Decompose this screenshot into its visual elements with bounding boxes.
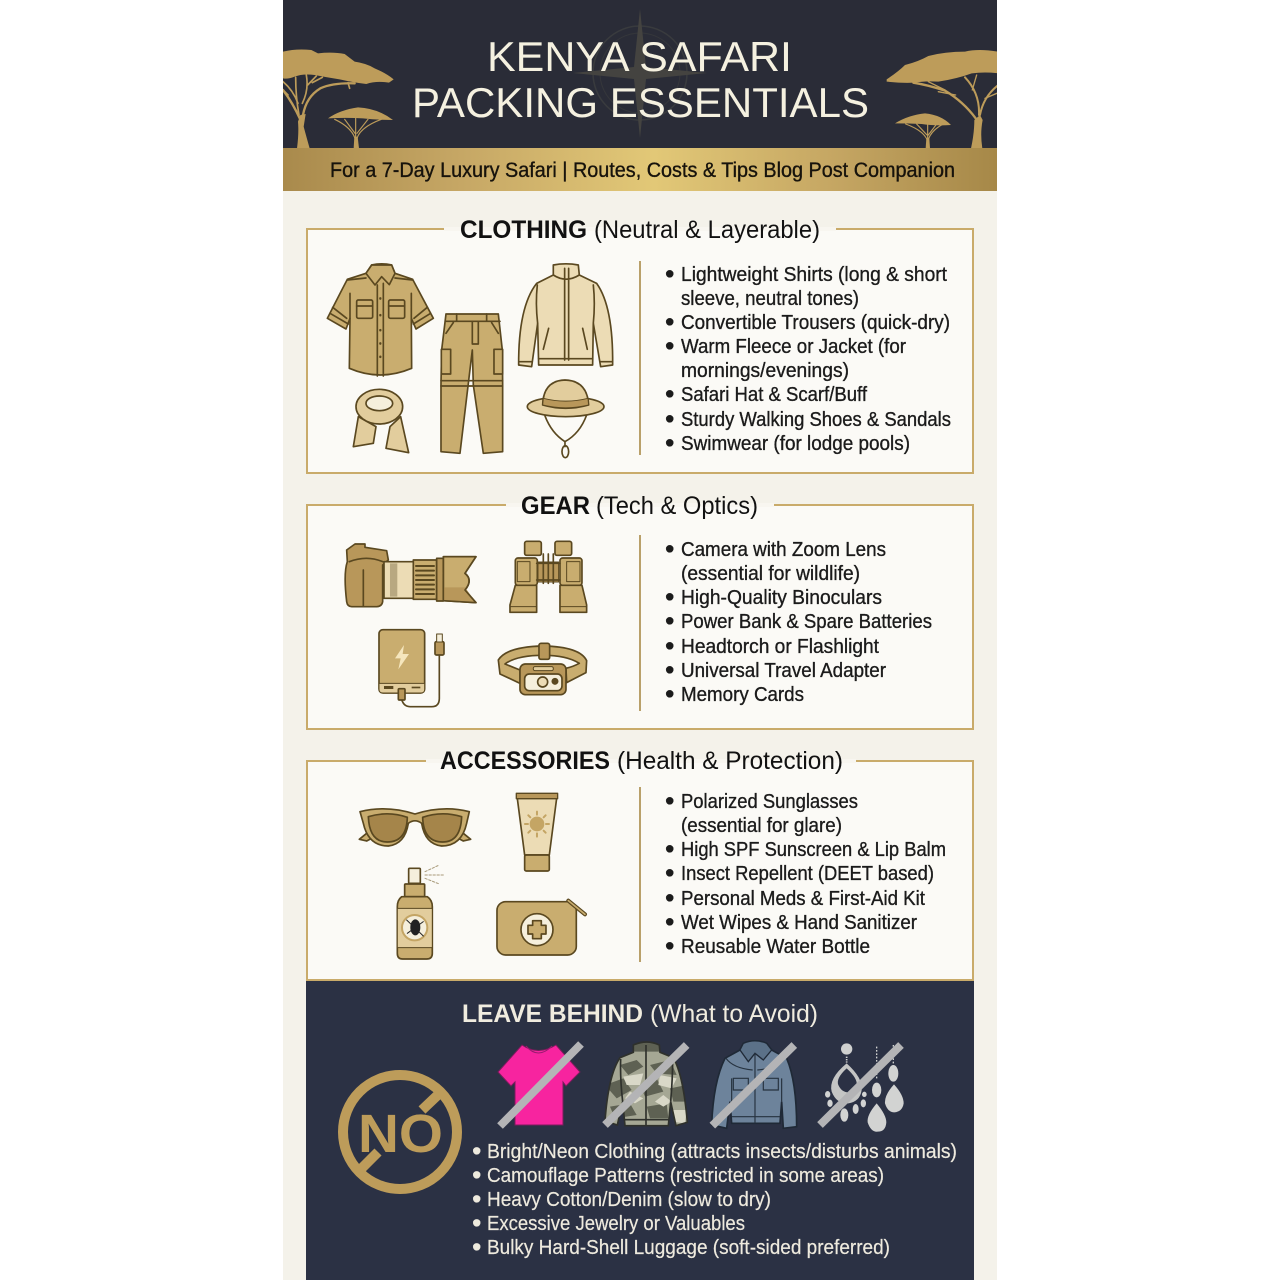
gear list bbox=[665, 534, 932, 709]
gear list: Headtorch or Flashlight bbox=[681, 635, 879, 658]
accessories list: Insect Repellent (DEET based) bbox=[681, 862, 934, 885]
gear list: • bbox=[665, 631, 674, 661]
icon: sunglasses bbox=[359, 809, 471, 846]
accessories list: • bbox=[665, 883, 674, 913]
gear list: • bbox=[665, 655, 674, 685]
accessories list: Polarized Sunglasses bbox=[681, 790, 858, 813]
icon: jewelry bbox=[820, 1043, 904, 1132]
gear list: • bbox=[665, 582, 674, 612]
icon: sunscreen tube bbox=[516, 793, 558, 871]
clothing list: Sturdy Walking Shoes & Sandals bbox=[681, 408, 951, 431]
icon: no symbol bbox=[343, 1075, 457, 1189]
gear list: Memory Cards bbox=[681, 683, 804, 706]
icon: headtorch bbox=[498, 643, 587, 695]
clothing list: Lightweight Shirts (long & short bbox=[681, 263, 947, 286]
icon: first-aid kit bbox=[497, 901, 585, 955]
icon: camouflage jacket bbox=[605, 1040, 687, 1126]
clothing list: • bbox=[665, 331, 674, 361]
icon: safari hat bbox=[527, 380, 604, 458]
accessories list: • bbox=[665, 907, 674, 937]
subtitle band bbox=[283, 148, 997, 191]
heading: gear: GEAR bbox=[521, 492, 590, 520]
icon: binoculars bbox=[510, 541, 587, 612]
leave-behind list: Bright/Neon Clothing (attracts insects/disturbs animals) bbox=[487, 1140, 957, 1163]
acacia tree: right small bbox=[895, 113, 951, 148]
accessories list: High SPF Sunscreen & Lip Balm bbox=[681, 838, 946, 861]
leave-behind list: Bulky Hard-Shell Luggage (soft-sided preferred) bbox=[487, 1236, 890, 1259]
icon: camera bbox=[345, 544, 476, 607]
page background bbox=[283, 0, 997, 1280]
accessories list: • bbox=[665, 931, 674, 961]
leave-behind list: Camouflage Patterns (restricted in some areas) bbox=[487, 1164, 884, 1187]
compass watermark bbox=[573, 9, 707, 138]
heading: gear: (Tech & Optics) bbox=[596, 492, 758, 520]
acacia tree: left large bbox=[283, 49, 394, 148]
icon: trousers bbox=[441, 314, 503, 453]
accessories list: Reusable Water Bottle bbox=[681, 935, 870, 958]
heading: accessories: (Health & Protection) bbox=[617, 747, 843, 775]
gear list: • bbox=[665, 606, 674, 636]
icon: denim jacket bbox=[712, 1041, 797, 1128]
leave-behind list: Heavy Cotton/Denim (slow to dry) bbox=[487, 1188, 771, 1211]
heading: leave behind: (What to Avoid) bbox=[650, 1000, 818, 1028]
gear list: Power Bank & Spare Batteries bbox=[681, 610, 932, 633]
acacia tree: left small bbox=[328, 107, 393, 148]
accessories list: (essential for glare) bbox=[681, 814, 842, 837]
clothing list: Swimwear (for lodge pools) bbox=[681, 432, 910, 455]
main title: PACKING ESSENTIALS bbox=[412, 79, 869, 126]
clothing list: • bbox=[665, 404, 674, 434]
heading: clothing: (Neutral & Layerable) bbox=[594, 216, 820, 244]
leave-behind list bbox=[472, 1136, 957, 1262]
accessories list: • bbox=[665, 786, 674, 816]
accessories list: Personal Meds & First-Aid Kit bbox=[681, 887, 925, 910]
gear list: • bbox=[665, 679, 674, 709]
leave-behind list: • bbox=[472, 1232, 481, 1262]
clothing list: • bbox=[665, 259, 674, 289]
icon: scarf bbox=[353, 389, 409, 453]
icon: fleece jacket bbox=[519, 264, 613, 367]
clothing list bbox=[665, 259, 951, 458]
header banner bbox=[283, 0, 998, 148]
clothing list: Warm Fleece or Jacket (for bbox=[681, 335, 906, 358]
acacia tree: right large bbox=[887, 50, 998, 148]
clothing list: sleeve, neutral tones) bbox=[681, 287, 859, 310]
heading: accessories: ACCESSORIES bbox=[440, 747, 610, 775]
main title bbox=[415, 42, 868, 118]
gear list: (essential for wildlife) bbox=[681, 562, 860, 585]
clothing list: mornings/evenings) bbox=[681, 359, 849, 382]
main title: KENYA SAFARI bbox=[487, 33, 792, 80]
gear list: Camera with Zoom Lens bbox=[681, 538, 886, 561]
accessories list: • bbox=[665, 834, 674, 864]
clothing list: Convertible Trousers (quick-dry) bbox=[681, 311, 950, 334]
gear list: • bbox=[665, 534, 674, 564]
clothing list: • bbox=[665, 379, 674, 409]
accessories list: • bbox=[665, 858, 674, 888]
clothing list: Safari Hat & Scarf/Buff bbox=[681, 383, 867, 406]
accessories list: Wet Wipes & Hand Sanitizer bbox=[681, 911, 917, 934]
gear list: Universal Travel Adapter bbox=[681, 659, 886, 682]
panel: accessories bbox=[307, 747, 973, 980]
panel: leave behind bbox=[306, 981, 974, 1280]
icon: shirt bbox=[327, 264, 433, 376]
leave-behind list: • bbox=[472, 1136, 481, 1166]
accessories list bbox=[665, 786, 946, 961]
leave-behind list: • bbox=[472, 1184, 481, 1214]
panel: gear bbox=[307, 492, 973, 729]
clothing list: • bbox=[665, 428, 674, 458]
gear list: High-Quality Binoculars bbox=[681, 586, 882, 609]
leave-behind list: Excessive Jewelry or Valuables bbox=[487, 1212, 745, 1235]
icon: neon t-shirt bbox=[498, 1044, 581, 1126]
subtitle band: For a 7-Day Luxury Safari | Routes, Costs & Tips Blog Post Companion bbox=[330, 159, 955, 182]
leave-behind list: • bbox=[472, 1208, 481, 1238]
panel: clothing bbox=[307, 216, 973, 473]
leave-behind list: • bbox=[472, 1160, 481, 1190]
icon: power bank bbox=[379, 630, 444, 707]
heading: clothing: CLOTHING bbox=[460, 216, 587, 244]
icon: insect repellent bbox=[397, 865, 443, 959]
heading: leave behind: LEAVE BEHIND bbox=[462, 1000, 643, 1028]
clothing list: • bbox=[665, 307, 674, 337]
icon: no symbol: NO bbox=[358, 1104, 443, 1164]
